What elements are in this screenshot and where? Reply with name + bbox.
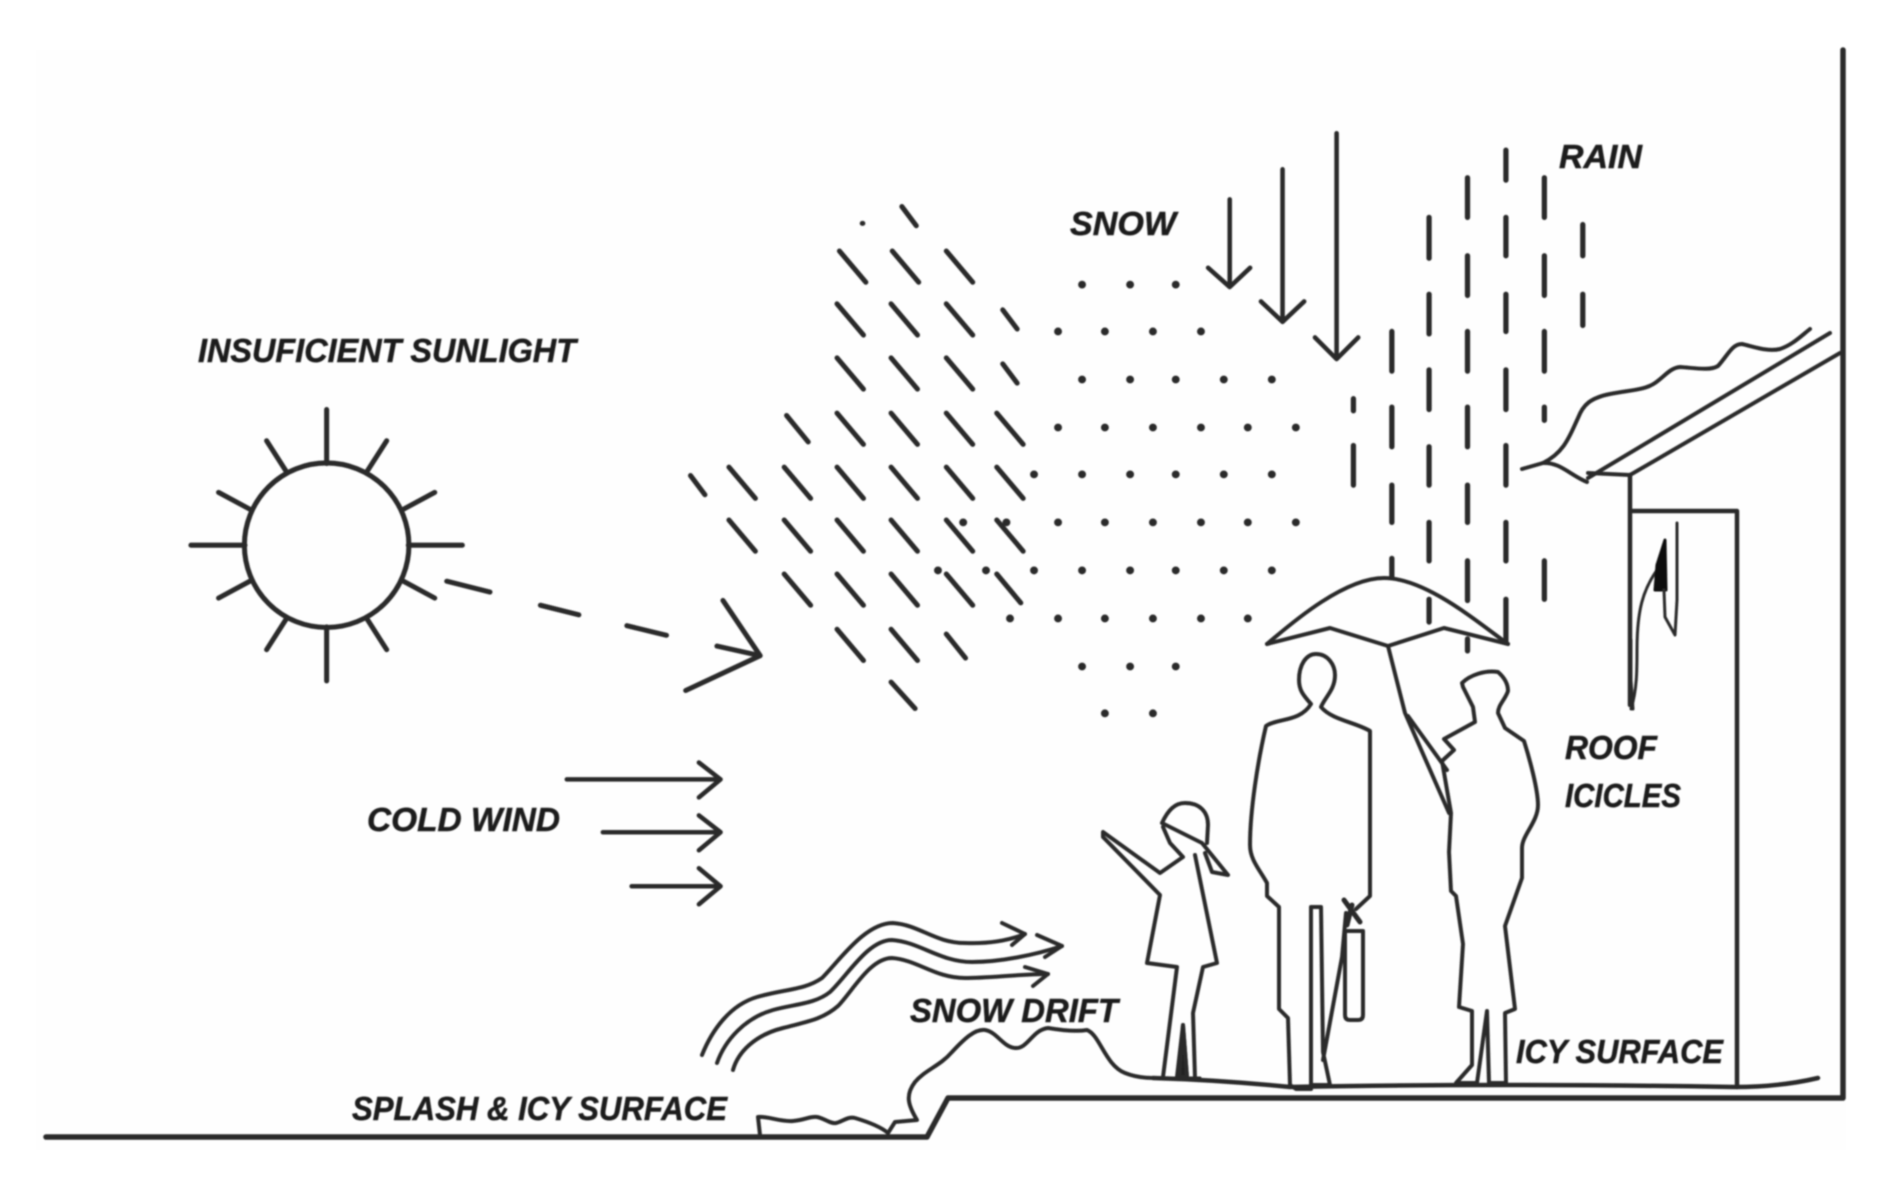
snow drift (888, 1028, 1153, 1133)
label: roof: ROOF (1565, 729, 1658, 766)
label: snow drift: SNOW DRIFT (910, 992, 1121, 1029)
label: snow: SNOW (1070, 205, 1179, 242)
snow dots (938, 285, 1296, 713)
roof with snow layer (1522, 329, 1840, 482)
arrow: dashed sunlight ray (447, 581, 760, 691)
arrows: cold wind (567, 763, 721, 904)
arrows: falling snow (1208, 133, 1358, 359)
man figure with bag (1250, 654, 1370, 1089)
woman figure (1442, 672, 1538, 1083)
roof icicles (1631, 523, 1677, 709)
label: splash and icy surface: SPLASH & ICY SURFACE (352, 1090, 728, 1127)
label: icy surface: ICY SURFACE (1516, 1033, 1724, 1070)
icon: sun (191, 410, 462, 681)
splash puddle (758, 1117, 888, 1135)
rain dashes (1353, 150, 1583, 651)
ground surface line (1153, 1078, 1818, 1087)
label: insufficient sunlight: INSUFICIENT SUNLIGHT (198, 332, 579, 369)
blowing snow curves with arrowheads (702, 923, 1062, 1070)
diagonal sleet dashes (691, 207, 1023, 709)
umbrella (1267, 578, 1508, 813)
label: rain: RAIN (1559, 138, 1643, 175)
label: cold wind: COLD WIND (367, 801, 560, 838)
child figure (1103, 803, 1228, 1078)
label: icicles: ICICLES (1565, 777, 1681, 814)
door frame (1630, 475, 1737, 1087)
